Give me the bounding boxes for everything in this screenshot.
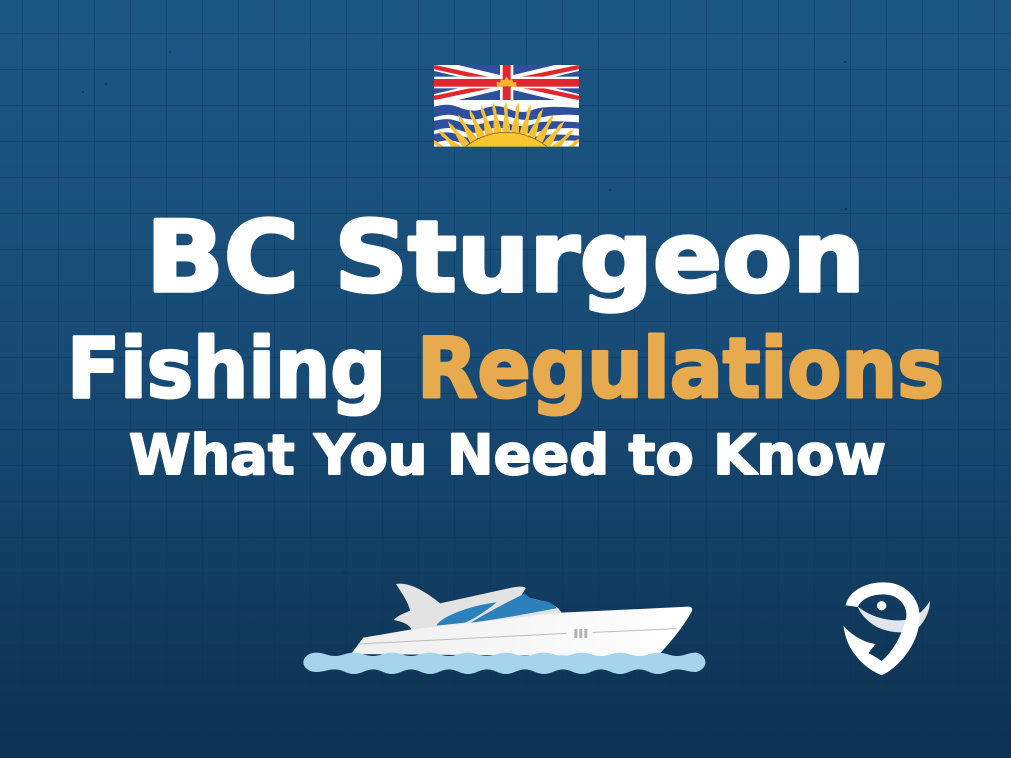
yacht windows (437, 593, 557, 626)
subtitle: What You Need to Know (129, 423, 886, 487)
flag waves (434, 105, 579, 146)
title line 2: Fishing (67, 320, 386, 417)
flag sun rays (434, 102, 579, 147)
logo tail swoosh (857, 601, 930, 632)
icon: British Columbia flag (434, 65, 579, 147)
title line 2 (67, 320, 944, 417)
logo hook body (844, 583, 919, 675)
highlighted word: Regulations: Regulations (417, 320, 944, 417)
flag sun disc (465, 132, 548, 147)
yacht fin and cabin (394, 584, 563, 630)
flag crown (497, 76, 516, 86)
water waves (303, 653, 705, 674)
logo fish eye (877, 601, 886, 610)
yacht vents (574, 629, 587, 638)
yacht hull (351, 607, 692, 657)
yacht stripe (358, 629, 677, 644)
icon: white yacht on waves (303, 584, 705, 674)
flag union canton (434, 65, 579, 100)
icon: fish hook logo (844, 583, 930, 675)
title line 1: BC Sturgeon (146, 201, 865, 315)
